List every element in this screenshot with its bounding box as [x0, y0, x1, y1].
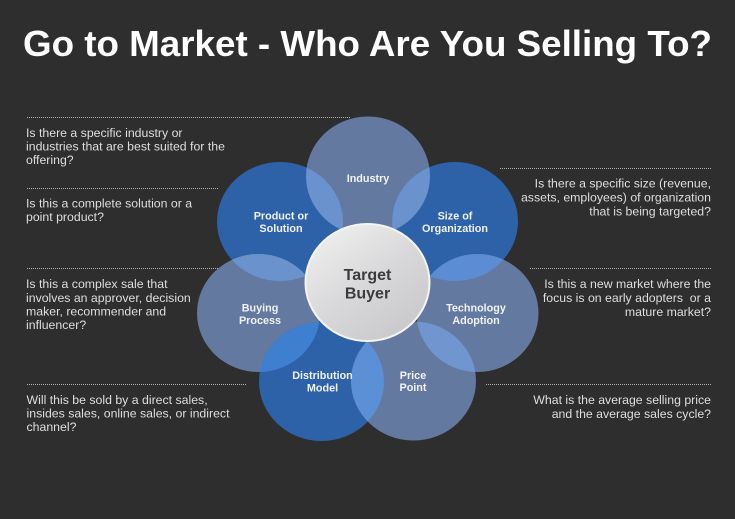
- text block: sales channel question: channel?: [26, 420, 77, 434]
- overlap: Industry and Product: [306, 168, 343, 229]
- infographic canvas: [24, 30, 711, 441]
- text block: new market question: focus is on early adopters or a: [543, 291, 711, 305]
- text block: organization size question: [500, 168, 711, 218]
- text block: new market question: [530, 268, 711, 319]
- text block: sales channel question: insides sales, online sales, or indirect: [26, 406, 230, 420]
- label: Price Point: Point: [400, 382, 427, 394]
- overlap: Technology and Size: [430, 254, 504, 281]
- text block: complex sale question: involves an approver, decision: [26, 291, 191, 305]
- overlap: Distribution and Price: [351, 342, 384, 422]
- text block: industry question: [26, 118, 350, 167]
- label: Technology Adoption: Technology: [446, 302, 506, 314]
- label: Distribution Model: Distribution: [292, 370, 353, 382]
- title: Go to Market - Who Are You Selling To?: [23, 23, 712, 64]
- text block: selling price question: [486, 384, 711, 421]
- petal: Product or Solution: [217, 162, 343, 281]
- label: Size of Organization: Organization: [422, 223, 488, 235]
- text block: organization size question: Is there a specific size (revenue,: [535, 176, 711, 190]
- hub circle: Target Buyer: [306, 224, 430, 341]
- label: Distribution Model: Model: [307, 382, 338, 394]
- petal: Technology Adoption: [416, 254, 538, 372]
- text block: selling price question: What is the average selling price: [533, 393, 711, 407]
- label: Technology Adoption: Adoption: [452, 315, 500, 327]
- text block: selling price question: and the average sales cycle?: [552, 407, 711, 421]
- overlap: Buying and Product: [232, 254, 305, 281]
- label: Target Buyer: Target: [344, 267, 391, 284]
- overlap: Industry and Size: [392, 167, 430, 230]
- overlap: Technology and Price: [417, 322, 476, 372]
- text block: new market question: Is this a new market where the: [544, 277, 711, 291]
- text block: organization size question: that is being targeted?: [589, 204, 711, 218]
- text block: new market question: mature market?: [625, 305, 711, 319]
- text block: sales channel question: Will this be sold by a direct sales,: [26, 393, 208, 407]
- text block: industry question: industries that are best suited for the: [26, 140, 225, 154]
- text block: complex sale question: [26, 268, 218, 332]
- text block: complex sale question: influencer?: [26, 318, 86, 332]
- text block: industry question: Is there a specific industry or: [26, 126, 183, 140]
- text block: sales channel question: [26, 384, 247, 434]
- text block: solution question: point product?: [26, 210, 104, 224]
- text block: complex sale question: Is this a complex sale that: [26, 277, 168, 291]
- petal: Buying Process: [197, 254, 320, 372]
- text block: industry question: offering?: [26, 153, 74, 167]
- label: Size of Organization: Size of: [438, 210, 472, 222]
- label: Price Point: Price: [400, 370, 426, 382]
- text block: solution question: [26, 188, 218, 224]
- petal: Industry: [306, 116, 430, 236]
- text block: solution question: Is this a complete solution or a: [26, 196, 192, 210]
- overlap: Buying and Distribution: [260, 322, 320, 372]
- text block: organization size question: assets, employees) of organization: [521, 190, 711, 204]
- petal: Size of Organization: [392, 162, 518, 281]
- label: Industry: Industry: [347, 173, 389, 185]
- label: Target Buyer: Buyer: [345, 286, 390, 302]
- label: Buying Process: Process: [239, 315, 281, 327]
- panel: petal diagram: [197, 116, 538, 441]
- label: Product or Solution: Product or: [254, 210, 308, 222]
- petal: Price Point: [351, 322, 476, 440]
- text block: complex sale question: maker, recommender and: [26, 304, 166, 318]
- label: Product or Solution: Solution: [259, 223, 303, 235]
- label: Buying Process: Buying: [242, 302, 278, 314]
- petal: Distribution Model: [259, 322, 384, 441]
